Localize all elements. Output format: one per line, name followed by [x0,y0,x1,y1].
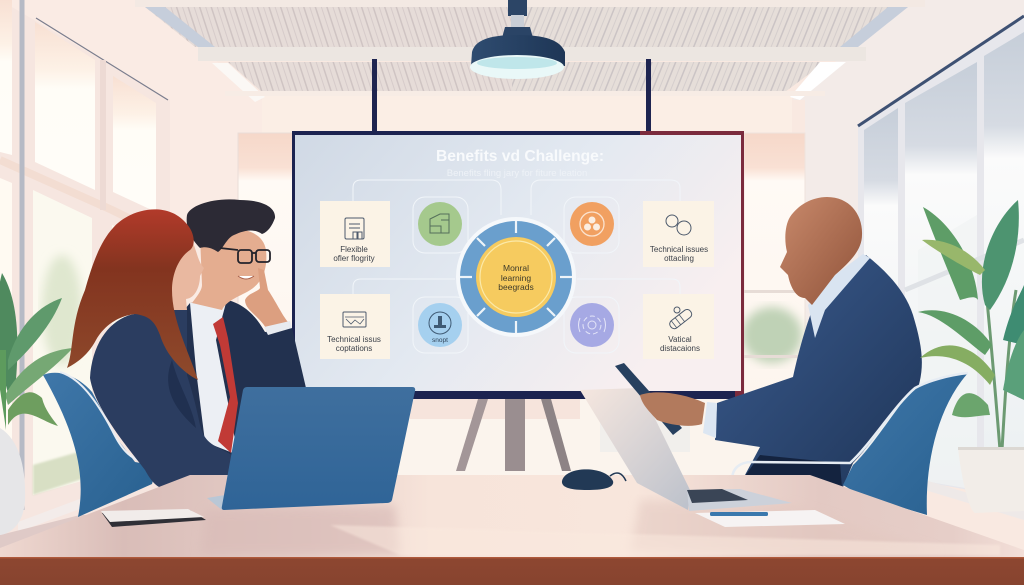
jacket [90,307,232,489]
card: vertical distractions [643,294,714,359]
card: flexible: Flexible [340,245,368,254]
blue laptop [207,387,415,510]
notebook on left [101,509,206,527]
hair [67,209,198,380]
back windows beside the screen [238,133,858,477]
jacket [180,300,306,480]
central wheel [456,217,576,337]
screen title: Benefits vd Challenge: [436,148,604,165]
mouse [562,469,626,490]
screen stand [456,399,571,471]
cuff [264,321,292,335]
right chair [732,373,968,515]
wood edge [0,557,1024,585]
card: technical issues right: ottacling [664,254,694,263]
icon: orange circle [570,202,614,246]
presentation screen [292,131,744,399]
central wheel: beegrads [498,282,534,292]
card: technical issues left [320,294,390,359]
man on left with glasses [180,199,306,480]
card: technical issues left: coptations [336,344,372,353]
head [780,197,862,305]
glasses [220,248,270,263]
card: flexible [320,201,390,267]
central wheel: learning [501,273,531,283]
card: vertical distractions: Vatical [668,335,692,344]
wheel label: Monral [503,263,529,273]
tie [213,317,238,453]
card: flexible: ofler flogrity [333,254,375,263]
card: technical issues right: Technical issues [650,245,708,254]
icon: purple circle [570,303,614,347]
hand on chin [245,268,288,328]
silver laptop [580,388,792,511]
smile [238,276,254,279]
card: vertical distractions: distacaions [660,344,700,353]
icon: blue circle: snopt [432,337,448,344]
face [165,240,204,310]
table [0,475,1024,585]
ceiling panels [135,0,925,102]
man on right torso [703,197,922,488]
screen subtitle: Benefits fling jary for fiture leation [447,168,587,179]
woman on left [67,209,232,489]
left windows [0,0,200,560]
collar [808,254,870,338]
head [192,229,266,310]
notepad and pen [695,510,845,527]
ceiling lamp [470,0,565,79]
hand holding phone [615,363,705,435]
right plant and pot [918,200,1024,513]
hair [187,199,275,252]
connector outlines [353,180,680,353]
right windows [858,15,1024,520]
left plant and pot [0,273,73,535]
icon: green circle [418,202,462,246]
left chair [43,372,157,517]
card: technical issues left: Technical issus [327,335,381,344]
icon: blue circle [418,303,462,347]
screen mount poles [372,59,651,132]
cuff [703,402,717,438]
card: technical issues right [643,201,714,267]
shirt [190,303,238,455]
